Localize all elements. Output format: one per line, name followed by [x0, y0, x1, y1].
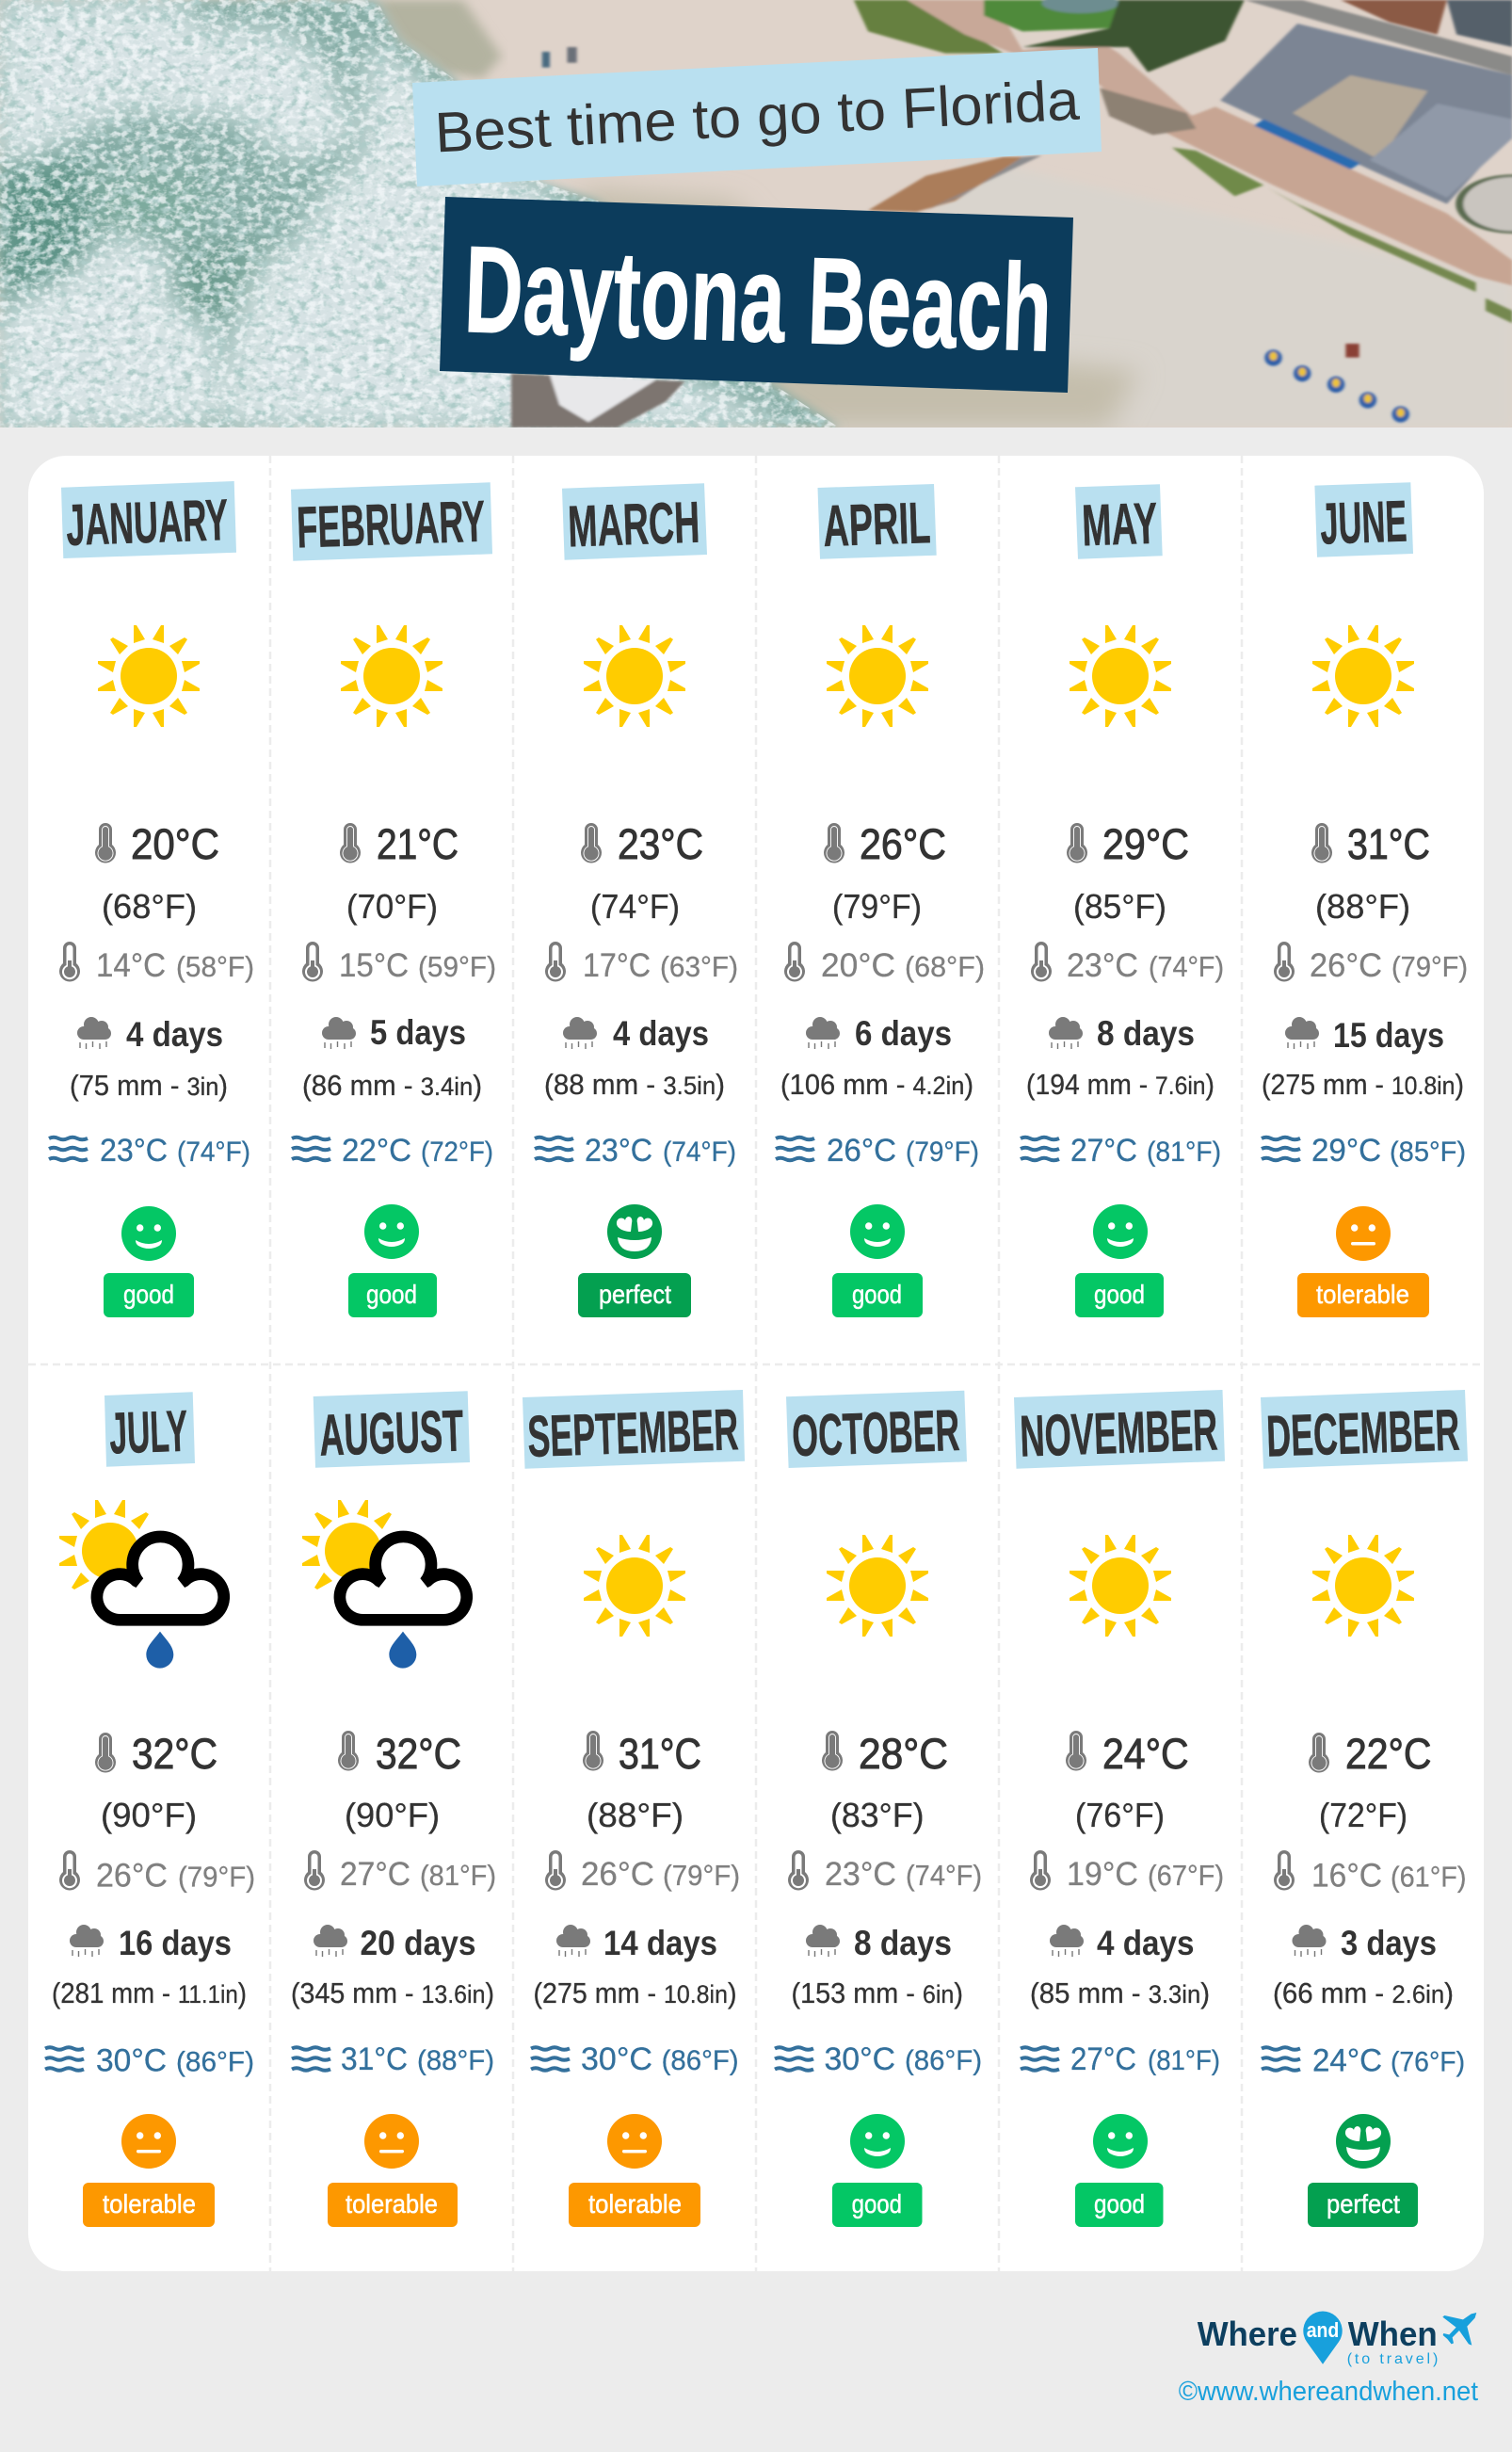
rainfall: (281 mm - 11.1in) [52, 1976, 247, 2009]
average low temperature [302, 942, 496, 984]
rainfall: (275 mm - 10.8in) [533, 1976, 736, 2009]
month label: August [314, 1391, 470, 1469]
average low temperature [784, 942, 985, 984]
month label: January: JANUARY [65, 488, 229, 558]
average low temperature: 26°C [96, 1857, 168, 1895]
rainfall [791, 1924, 963, 2009]
rating: tolerable: tolerable [1316, 1280, 1409, 1309]
logo: Where and When: When [1348, 2315, 1438, 2353]
average low temperature: 23°C [1067, 947, 1138, 984]
average low temperature [1031, 942, 1224, 984]
rating: tolerable: tolerable [346, 2189, 438, 2218]
average high temperature: 31°C [619, 1730, 701, 1778]
rating: perfect: perfect [1327, 2189, 1400, 2218]
sea temperature: 23°C [585, 1133, 652, 1169]
average high temperature [822, 1730, 948, 1834]
rating: perfect [578, 1204, 691, 1317]
average high temperature: (68°F) [102, 887, 197, 926]
average high temperature: 31°C [1347, 820, 1430, 868]
rainfall: 8 days [1097, 1014, 1195, 1053]
rainfall [533, 1924, 736, 2009]
banner: best time to go to Florida: Best time to go to Florida [433, 69, 1081, 164]
sea temperature: (88°F) [417, 2045, 494, 2076]
average low temperature: 23°C [825, 1856, 896, 1893]
rainfall: (85 mm - 3.3in) [1030, 1976, 1210, 2009]
sea temperature: 29°C [1311, 1133, 1381, 1169]
month label: July: JULY [108, 1399, 188, 1466]
average low temperature: (58°F) [176, 950, 254, 983]
sea temperature [292, 1133, 493, 1169]
sea temperature: (76°F) [1391, 2047, 1465, 2077]
month label: May: MAY [1081, 492, 1158, 558]
rating: tolerable: tolerable [588, 2189, 682, 2218]
average low temperature [59, 1850, 255, 1895]
rating: good [1075, 2114, 1164, 2227]
sea temperature: (72°F) [421, 1137, 493, 1168]
sea temperature: (81°F) [1147, 1137, 1221, 1168]
average high temperature: (88°F) [587, 1796, 684, 1834]
average high temperature: (88°F) [1315, 887, 1410, 926]
average low temperature [1274, 1850, 1467, 1895]
average high temperature: (72°F) [1319, 1796, 1407, 1834]
average high temperature: 32°C [376, 1730, 461, 1778]
rainfall [780, 1014, 973, 1101]
rainfall: 4 days [613, 1014, 709, 1053]
average low temperature: (67°F) [1148, 1859, 1224, 1892]
rainfall [544, 1014, 725, 1101]
rating: good [832, 2114, 923, 2227]
average low temperature: 26°C [1310, 947, 1382, 984]
sea temperature [775, 2041, 982, 2077]
average low temperature: (74°F) [1149, 950, 1224, 983]
average low temperature [545, 1850, 740, 1893]
month label: September: SEPTEMBER [526, 1397, 739, 1470]
icon: sun [827, 1535, 928, 1637]
sea temperature: 30°C [825, 2041, 895, 2077]
sea temperature [531, 2041, 739, 2077]
average high temperature [1311, 820, 1430, 926]
average high temperature [824, 820, 946, 926]
logo: Where and When: and [1307, 2318, 1339, 2342]
sea temperature: (86°F) [905, 2045, 982, 2076]
average high temperature: (90°F) [345, 1796, 440, 1834]
average high temperature: (79°F) [832, 887, 922, 926]
column: October [775, 1391, 982, 2227]
rating: tolerable [569, 2114, 700, 2227]
column: December [1261, 1390, 1468, 2227]
month label: September [523, 1390, 745, 1470]
rating: good: good [123, 1280, 174, 1309]
rainfall: 4 days [126, 1015, 223, 1054]
rainfall: (66 mm - 2.6in) [1273, 1976, 1454, 2009]
column: April [776, 484, 985, 1317]
average high temperature [1067, 820, 1189, 926]
average low temperature: 20°C [821, 947, 895, 984]
rainfall: 16 days [119, 1924, 232, 1962]
average high temperature: 24°C [1102, 1730, 1189, 1778]
average low temperature [788, 1850, 982, 1893]
sea temperature [45, 2043, 254, 2079]
average low temperature: 16°C [1311, 1857, 1382, 1895]
rating: good: good [1094, 2189, 1145, 2218]
average high temperature [340, 820, 458, 926]
column: January [49, 481, 254, 1317]
month label: November: NOVEMBER [1019, 1397, 1218, 1470]
icon: sun [1312, 625, 1414, 727]
month label: March [562, 483, 707, 560]
rating: good: good [852, 1280, 902, 1309]
rating: good [348, 1204, 437, 1317]
rainfall [1030, 1924, 1210, 2009]
average high temperature: (90°F) [101, 1796, 197, 1834]
average high temperature: (70°F) [346, 887, 438, 926]
rainfall [291, 1924, 494, 2009]
average high temperature: 21°C [377, 820, 458, 868]
column: November [1014, 1390, 1225, 2227]
sea temperature: (74°F) [177, 1137, 250, 1168]
rating: good [832, 1204, 923, 1317]
sea temperature [1262, 2043, 1465, 2079]
rainfall [302, 1013, 482, 1102]
average high temperature [581, 820, 703, 926]
average low temperature: (74°F) [906, 1859, 982, 1892]
header aerial beach photo [0, 0, 1512, 427]
average low temperature: (63°F) [660, 950, 738, 983]
icon: sun [1070, 625, 1171, 727]
average high temperature: (85°F) [1073, 887, 1166, 926]
average high temperature: 22°C [1345, 1730, 1431, 1778]
average high temperature: 23°C [618, 820, 703, 868]
sea temperature: 31°C [341, 2041, 408, 2077]
logo: Where and When: Where [1198, 2315, 1297, 2353]
month label: June: JUNE [1319, 489, 1407, 557]
rating: good [1075, 1204, 1164, 1317]
rainfall: 15 days [1333, 1016, 1444, 1055]
sea temperature: 30°C [581, 2041, 652, 2077]
icon: sun [584, 1535, 685, 1637]
sea temperature: 24°C [1312, 2043, 1382, 2079]
month label: October [786, 1391, 967, 1469]
average high temperature [583, 1730, 701, 1834]
rainfall: 6 days [855, 1014, 952, 1053]
rainfall: (106 mm - 4.2in) [780, 1068, 973, 1101]
average low temperature [1030, 1850, 1224, 1893]
sea temperature: (86°F) [176, 2047, 254, 2077]
icon: sun [1070, 1535, 1171, 1637]
sea temperature [1262, 1133, 1466, 1169]
rainfall: 8 days [854, 1924, 952, 1962]
rainfall: (86 mm - 3.4in) [302, 1069, 482, 1102]
average high temperature [1066, 1730, 1189, 1834]
icon: sun [827, 625, 928, 727]
rainfall: 4 days [1097, 1924, 1194, 1962]
rating: perfect: perfect [599, 1280, 671, 1309]
sea temperature [49, 1133, 250, 1169]
icon: sun [584, 625, 685, 727]
sea temperature: 27°C [1070, 1133, 1137, 1169]
logo: Where and When [1198, 2311, 1476, 2367]
average low temperature: (68°F) [905, 950, 985, 983]
rating: tolerable: tolerable [103, 2189, 196, 2218]
average low temperature: (61°F) [1391, 1861, 1467, 1893]
month label: August: AUGUST [318, 1398, 465, 1469]
average low temperature [304, 1850, 496, 1893]
panel: monthly climate table [28, 456, 1484, 2271]
rainfall: 20 days [360, 1924, 476, 1962]
sea temperature: (79°F) [906, 1137, 979, 1168]
rainfall: (88 mm - 3.5in) [544, 1068, 725, 1101]
rating: tolerable [1297, 1206, 1429, 1317]
sea temperature [1021, 1133, 1221, 1169]
sea temperature: 26°C [827, 1133, 896, 1169]
sea temperature: (81°F) [1148, 2045, 1220, 2076]
average low temperature: 26°C [581, 1856, 654, 1893]
rating: good [104, 1206, 194, 1317]
month label: July [105, 1392, 195, 1467]
column: February [291, 482, 496, 1317]
average low temperature: (79°F) [178, 1861, 255, 1893]
month label: October: OCTOBER [791, 1398, 960, 1469]
sea temperature: 27°C [1070, 2041, 1136, 2077]
rating: good: good [852, 2189, 902, 2218]
month label: April: APRIL [822, 491, 931, 559]
average low temperature: 19°C [1067, 1856, 1138, 1893]
rainfall [1026, 1014, 1214, 1101]
month label: January [61, 481, 236, 558]
icon: map pin [1303, 2311, 1343, 2364]
sea temperature: (86°F) [662, 2045, 739, 2076]
logo: Where and When: (to travel) [1347, 2351, 1438, 2367]
month label: April [817, 484, 937, 559]
icon: airplane [1442, 2313, 1476, 2346]
rating: perfect [1308, 2114, 1418, 2227]
rainfall [1273, 1924, 1454, 2009]
banner: Daytona Beach: Daytona Beach [462, 219, 1054, 378]
banner: best time to go to Florida [412, 48, 1102, 186]
average high temperature: (76°F) [1075, 1796, 1165, 1834]
rainfall [1262, 1016, 1464, 1101]
average high temperature: 32°C [132, 1730, 217, 1778]
average high temperature [95, 820, 219, 926]
average high temperature: (83°F) [830, 1796, 925, 1834]
average low temperature [1274, 942, 1468, 984]
average low temperature: 15°C [339, 947, 409, 984]
average high temperature [338, 1730, 461, 1834]
average high temperature [1309, 1730, 1431, 1834]
average low temperature [59, 942, 254, 984]
average high temperature: (74°F) [590, 887, 680, 926]
month label: May [1075, 484, 1163, 559]
sea temperature: 22°C [342, 1133, 411, 1169]
rainfall: 14 days [603, 1924, 717, 1962]
column: March [535, 483, 738, 1317]
rainfall [52, 1924, 247, 2009]
banner: Daytona Beach [440, 197, 1073, 393]
sea temperature [292, 2041, 494, 2077]
sea temperature [535, 1133, 736, 1169]
column: July [45, 1392, 255, 2227]
month label: February: FEBRUARY [296, 490, 486, 560]
month label: November [1014, 1390, 1225, 1470]
average low temperature: 27°C [340, 1856, 410, 1893]
average low temperature: (79°F) [1391, 950, 1468, 983]
rating: tolerable [83, 2114, 215, 2227]
icon: sun behind rain cloud [302, 1500, 467, 1669]
column: June [1262, 482, 1468, 1317]
average high temperature: 28°C [859, 1730, 948, 1778]
column: May [1021, 484, 1224, 1317]
rainfall: (75 mm - 3in) [70, 1069, 228, 1102]
average low temperature: (81°F) [420, 1859, 496, 1892]
average high temperature [95, 1730, 217, 1834]
rainfall: 3 days [1341, 1924, 1437, 1962]
sea temperature: 23°C [100, 1133, 168, 1169]
rating: good: good [1094, 1280, 1145, 1309]
icon: sun [1312, 1535, 1414, 1637]
column: September [523, 1390, 745, 2227]
sea temperature: (85°F) [1390, 1137, 1466, 1168]
average low temperature: (59°F) [418, 950, 496, 983]
website credit: ©www.whereandwhen.net [1179, 2377, 1478, 2407]
rainfall: 5 days [370, 1013, 466, 1052]
month label: June [1314, 482, 1413, 557]
column: August [291, 1391, 496, 2227]
rainfall: (194 mm - 7.6in) [1026, 1068, 1214, 1101]
average low temperature: 17°C [583, 947, 651, 984]
average low temperature: (79°F) [663, 1859, 740, 1892]
sea temperature: 30°C [96, 2043, 167, 2079]
average low temperature: 14°C [96, 947, 166, 984]
rating: tolerable [328, 2114, 458, 2227]
rainfall: (275 mm - 10.8in) [1262, 1068, 1464, 1101]
sea temperature: (74°F) [663, 1137, 736, 1168]
icon: sun [98, 625, 200, 727]
month label: February [291, 482, 492, 561]
rating: good: good [366, 1280, 417, 1309]
rainfall: (345 mm - 13.6in) [291, 1976, 494, 2009]
rainfall [70, 1015, 228, 1102]
sea temperature [1021, 2041, 1220, 2077]
average high temperature: 20°C [131, 820, 219, 868]
sea temperature [776, 1133, 979, 1169]
icon: sun behind rain cloud [59, 1500, 224, 1669]
month label: March: MARCH [567, 491, 700, 559]
icon: sun [341, 625, 442, 727]
average high temperature: 26°C [860, 820, 946, 868]
rainfall: (153 mm - 6in) [791, 1976, 963, 2009]
average low temperature [545, 942, 738, 984]
average high temperature: 29°C [1102, 820, 1189, 868]
